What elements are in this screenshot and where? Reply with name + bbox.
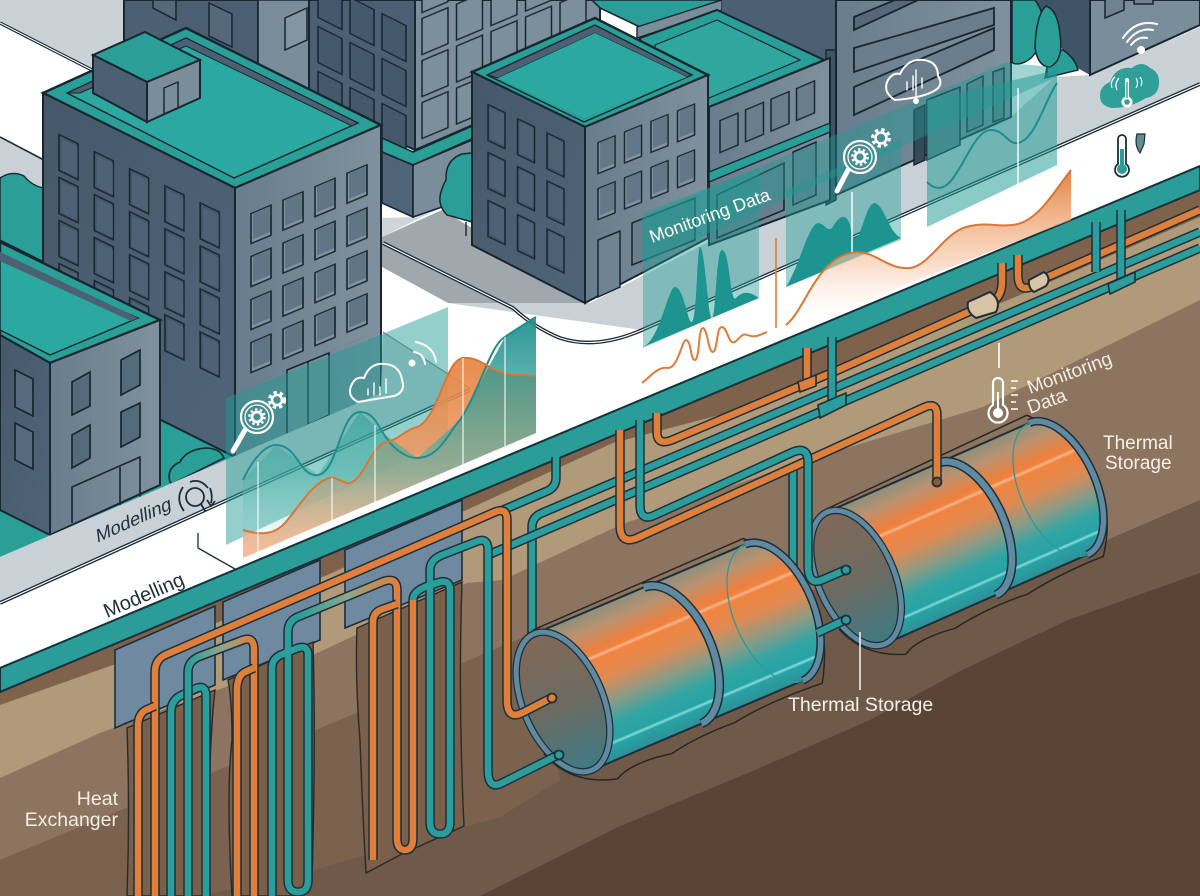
building: upper centre <box>309 0 600 217</box>
icon: wifi cloud thermometer <box>1100 23 1159 108</box>
building: upper right <box>826 0 1011 205</box>
tree left edge <box>0 173 44 262</box>
teal ground left <box>0 420 235 557</box>
pile caps <box>115 500 462 728</box>
sidewalk kerb line <box>0 332 470 603</box>
label: monitoring data soil: Monitoring <box>1025 349 1115 399</box>
tree beside centre building <box>440 153 472 236</box>
chart panel: monitoring band <box>642 63 1057 263</box>
chart panel: monitoring 1 <box>642 168 776 383</box>
label: thermal storage right: Storage <box>1105 453 1172 474</box>
label: thermal storage lower: Thermal Storage <box>788 694 933 716</box>
icon: thermometer white <box>988 378 1018 423</box>
bush <box>169 448 224 484</box>
grey paving top left <box>0 0 124 270</box>
label: thermal storage right <box>1103 433 1173 474</box>
chart panel: modelling A <box>226 307 448 545</box>
building: lower left <box>0 242 160 535</box>
pavement light <box>382 207 442 237</box>
tank right <box>789 399 1132 676</box>
label: heat exchanger: Exchanger <box>25 809 118 831</box>
icon: thermometer right <box>1115 134 1145 177</box>
leader line: modelling <box>198 533 235 569</box>
leader: monitoring <box>998 343 1000 368</box>
upper pipe network under tanks <box>488 210 1200 640</box>
label: heat exchanger: Heat <box>77 788 119 810</box>
soil: tan layer <box>0 217 1200 778</box>
soil: dark top layer <box>0 190 1200 705</box>
borehole pipes and tank feeds <box>138 406 937 896</box>
icon: cloud and signal left <box>350 342 436 402</box>
sidewalk band <box>0 332 470 603</box>
label: monitoring data panel: Monitoring Data <box>647 184 774 247</box>
chart panel: modelling B <box>243 317 536 558</box>
building: far right <box>1090 0 1200 75</box>
trees upper right <box>1012 0 1078 78</box>
icon: magnifier with arrows <box>179 481 215 511</box>
label: modelling on strip: Modelling <box>100 569 188 623</box>
label: monitoring data soil: Data <box>1025 385 1070 419</box>
label: heat exchanger <box>25 788 119 831</box>
soil: lower brown <box>0 635 560 896</box>
icon: magnifier with gears right <box>837 130 889 191</box>
roof penthouse <box>93 32 200 122</box>
label: thermal storage right: Thermal <box>1103 433 1173 454</box>
tank left <box>495 522 849 802</box>
building: back centre <box>640 10 830 245</box>
soil: darkest <box>480 573 1200 896</box>
building: upper left <box>124 0 309 100</box>
teal ground slab <box>0 166 1200 692</box>
roof sliver top <box>592 0 836 70</box>
chart panel: monitoring 3 <box>927 70 1057 227</box>
building: centre <box>472 18 708 303</box>
icon: magnifier with gears left <box>233 392 285 451</box>
main entrance <box>287 353 329 435</box>
pavement shadow <box>382 210 587 303</box>
building: main left <box>43 28 381 457</box>
leader: thermal storage <box>859 632 861 690</box>
soil: middle brown <box>0 190 1200 860</box>
tank nozzles <box>548 478 942 760</box>
kerb centre <box>383 84 1200 342</box>
pipe joint left <box>968 292 998 318</box>
boreholes <box>127 582 464 896</box>
lower left entrance <box>72 457 140 523</box>
pipe joint right <box>1029 272 1049 292</box>
icon: cloud top <box>886 60 940 103</box>
dark building behind trees <box>1032 0 1090 75</box>
pipe tees <box>798 272 1135 418</box>
chart panel: monitoring 2 <box>786 140 1071 330</box>
street pavement <box>448 27 1200 330</box>
label: modelling on sidewalk: Modelling <box>95 493 172 548</box>
